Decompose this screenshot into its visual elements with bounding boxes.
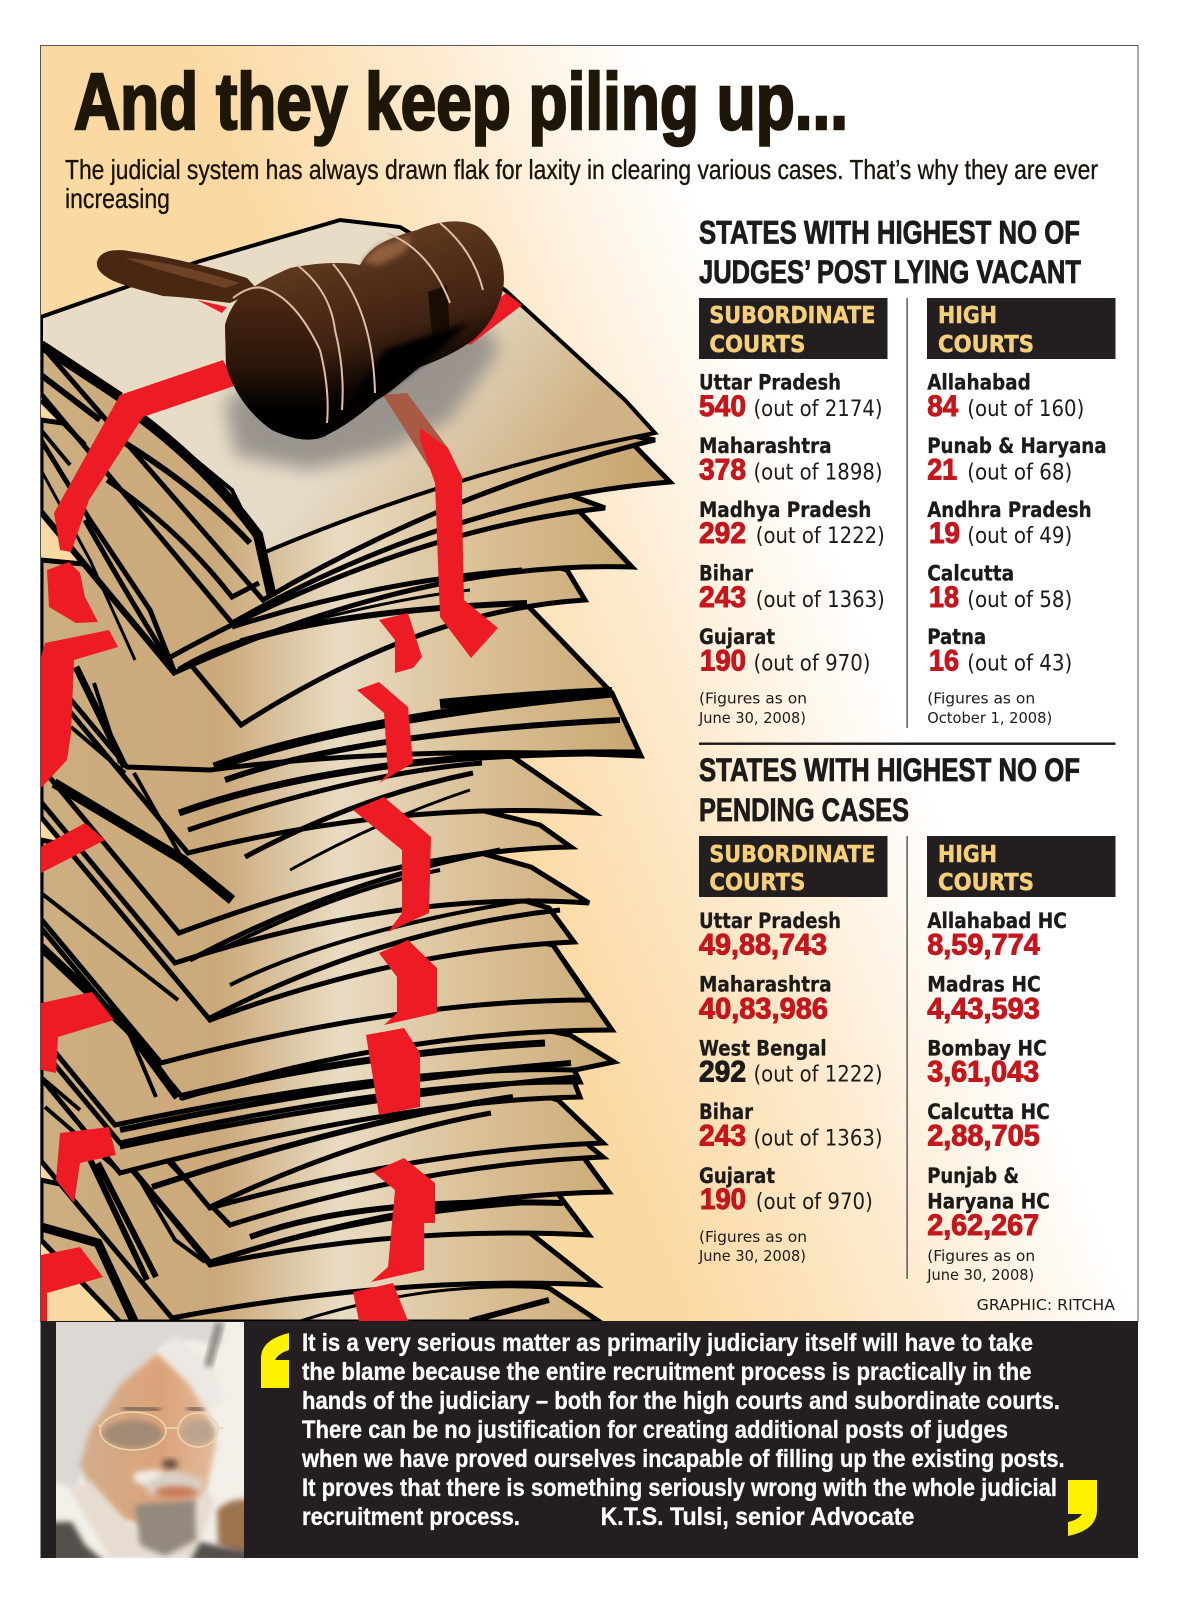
quote text: when we have proved ourselves incapable of filling up the existing posts. [301,1445,1065,1473]
gavel handle [97,250,258,303]
pending panel: high courts: 3,61,043 [927,1056,1039,1089]
pending panel: subordinate courts: Gujarat [699,1164,775,1188]
pending panel: subordinate courts: 190 [700,1183,746,1216]
vacancy panel: subordinate courts: (out of 970) [754,651,870,676]
pending panel: high courts: Calcutta HC [927,1100,1050,1124]
vacancy panel: subordinate courts: (out of 2174) [754,397,882,422]
pending panel: high courts: 4,43,593 [927,992,1040,1025]
gavel face [225,288,327,440]
quote text: recruitment process. [302,1503,520,1531]
pending panel: high courts: Punjab & [927,1164,1019,1188]
header box [699,836,888,897]
heading: pending cases: STATES WITH HIGHEST NO OF [699,752,1080,788]
heading: vacant posts: STATES WITH HIGHEST NO OF [699,215,1080,251]
background panel [40,46,1138,1322]
pending panel: high courts: 8,59,774 [927,928,1040,961]
vacancy panel: subordinate courts: June 30, 2008) [698,709,806,727]
pending panel: high courts: Allahabad HC [927,909,1067,933]
vacancy panel: high courts: 21 [927,454,957,487]
pending panel: subordinate courts: Bihar [699,1100,754,1124]
vacancy panel: subordinate courts: Maharashtra [699,434,832,458]
vacancy panel: subordinate courts: 292 [699,517,746,550]
header box: SUBORDINATE [709,303,875,329]
vacancy panel: high courts: Andhra Pradesh [927,498,1092,522]
pending panel: subordinate courts: (out of 970) [756,1190,873,1215]
pending panel: subordinate courts: (out of 1363) [754,1127,882,1152]
vacancy panel: high courts: (out of 58) [967,588,1072,613]
opening quote mark [261,1333,289,1388]
vacancy panel: high courts [927,298,1116,727]
header box: COURTS [709,870,805,896]
pending panel: subordinate courts: 292 [699,1056,746,1089]
vacancy panel: subordinate courts: Bihar [699,561,754,585]
vacancy panel: subordinate courts: (out of 1222) [756,524,885,549]
quote panel [40,1316,1138,1562]
header box [927,836,1116,897]
top sheet edge strips [41,345,272,597]
pending panel: high courts: Madras HC [927,973,1041,997]
vacancy panel: subordinate courts: 378 [699,454,746,487]
illustration: pile of case files with gavel [41,220,670,1322]
header box [927,298,1116,359]
quote text: It proves that there is something seriously wrong with the whole judicial [302,1474,1057,1502]
vacancy panel: high courts: (out of 68) [967,461,1072,486]
header box: HIGH [938,842,997,868]
gavel shadow [225,320,500,470]
vacancy panel: high courts: 19 [929,517,960,550]
vacancy panel: subordinate courts: (out of 1898) [754,461,882,486]
heading: vacant posts: JUDGES’ POST LYING VACANT [699,254,1081,290]
header box: SUBORDINATE [709,842,875,868]
pending panel: subordinate courts: 40,83,986 [699,992,828,1025]
vacancy panel: subordinate courts: Madhya Pradesh [699,498,871,522]
credit: GRAPHIC: RITCHA [977,1296,1115,1314]
gavel head [225,221,504,440]
pending panel: subordinate courts: Maharashtra [699,973,832,997]
vacancy panel: high courts: 16 [929,644,959,677]
pending panel: subordinate courts: West Bengal [699,1036,827,1060]
vacancy panel: high courts: 84 [927,390,958,423]
vacancy panel: subordinate courts: 190 [700,644,746,677]
closing quote mark [1068,1480,1097,1536]
column divider [906,836,908,1279]
gavel [97,221,504,440]
pending panel: subordinate courts: June 30, 2008) [698,1247,806,1265]
header box: COURTS [938,332,1034,358]
vacancy panel: high courts: 18 [929,581,959,614]
quote text: K.T.S. Tulsi, senior Advocate [601,1503,914,1531]
vacancy panel: subordinate courts: Gujarat [699,625,775,649]
header box [699,298,888,359]
pending panel: high courts: Haryana HC [927,1189,1050,1213]
header box: COURTS [938,870,1034,896]
intro text [65,154,1098,214]
quote text: It is a very serious matter as primarily judiciary itself will have to take [302,1329,1033,1357]
vacancy panel: high courts: Calcutta [927,561,1014,585]
vacancy panel: subordinate courts: Uttar Pradesh [699,370,841,394]
header box: HIGH [938,303,997,329]
vacancy panel: high courts: Allahabad [927,370,1031,394]
vacancy panel: high courts: Punab & Haryana [927,434,1107,458]
heading: vacant posts [699,215,1081,290]
vacancy panel: subordinate courts: 540 [699,390,746,423]
vacancy panel: subordinate courts [698,298,888,727]
vacancy panel: high courts: (Figures as on [927,690,1035,708]
pending panel: subordinate courts: 49,88,743 [699,928,827,961]
pending panel: subordinate courts: 243 [699,1120,746,1153]
quote text: There can be no justification for creating additional posts of judges [302,1416,1008,1444]
pending panel: high courts: June 30, 2008) [926,1266,1034,1284]
quote text: hands of the judiciary – both for the high courts and subordinate courts. [302,1387,1060,1415]
pending panel: high courts: 2,62,267 [927,1209,1039,1242]
pending panel: high courts [926,836,1116,1284]
paper stack [41,330,670,1322]
ribbons [41,293,522,1321]
heading: pending cases: PENDING CASES [699,792,909,828]
pending panel: high courts: Bombay HC [927,1036,1047,1060]
vacancy panel: high courts: (out of 49) [967,524,1072,549]
quote text: the blame because the entire recruitment process is practically in the [302,1358,1032,1386]
vacancy panel: subordinate courts: 243 [699,581,746,614]
top sheet [41,220,655,553]
column divider [906,298,908,728]
vacancy panel: subordinate courts: (Figures as on [699,690,807,708]
pending panel: subordinate courts [698,836,888,1265]
pending panel: subordinate courts: Uttar Pradesh [699,909,841,933]
pending panel: subordinate courts: (out of 1222) [754,1063,882,1088]
portrait [50,1316,250,1562]
vacancy panel: high courts: October 1, 2008) [927,709,1052,727]
vacancy panel: high courts: Patna [927,625,986,649]
sheet edge lines [41,440,640,1321]
vacancy panel: high courts: (out of 160) [967,397,1084,422]
pending panel: high courts: (Figures as on [927,1247,1035,1265]
header box: COURTS [709,332,805,358]
vacancy panel: high courts: (out of 43) [967,651,1072,676]
title: And they keep piling up... [74,57,848,146]
pending panel: subordinate courts: (Figures as on [699,1228,807,1246]
section rule [699,742,1116,745]
intro text: increasing [65,183,170,214]
vacancy panel: subordinate courts: (out of 1363) [756,588,885,613]
pending panel: high courts: 2,88,705 [927,1120,1040,1153]
quote text [301,1329,1065,1531]
heading: pending cases [699,752,1080,828]
